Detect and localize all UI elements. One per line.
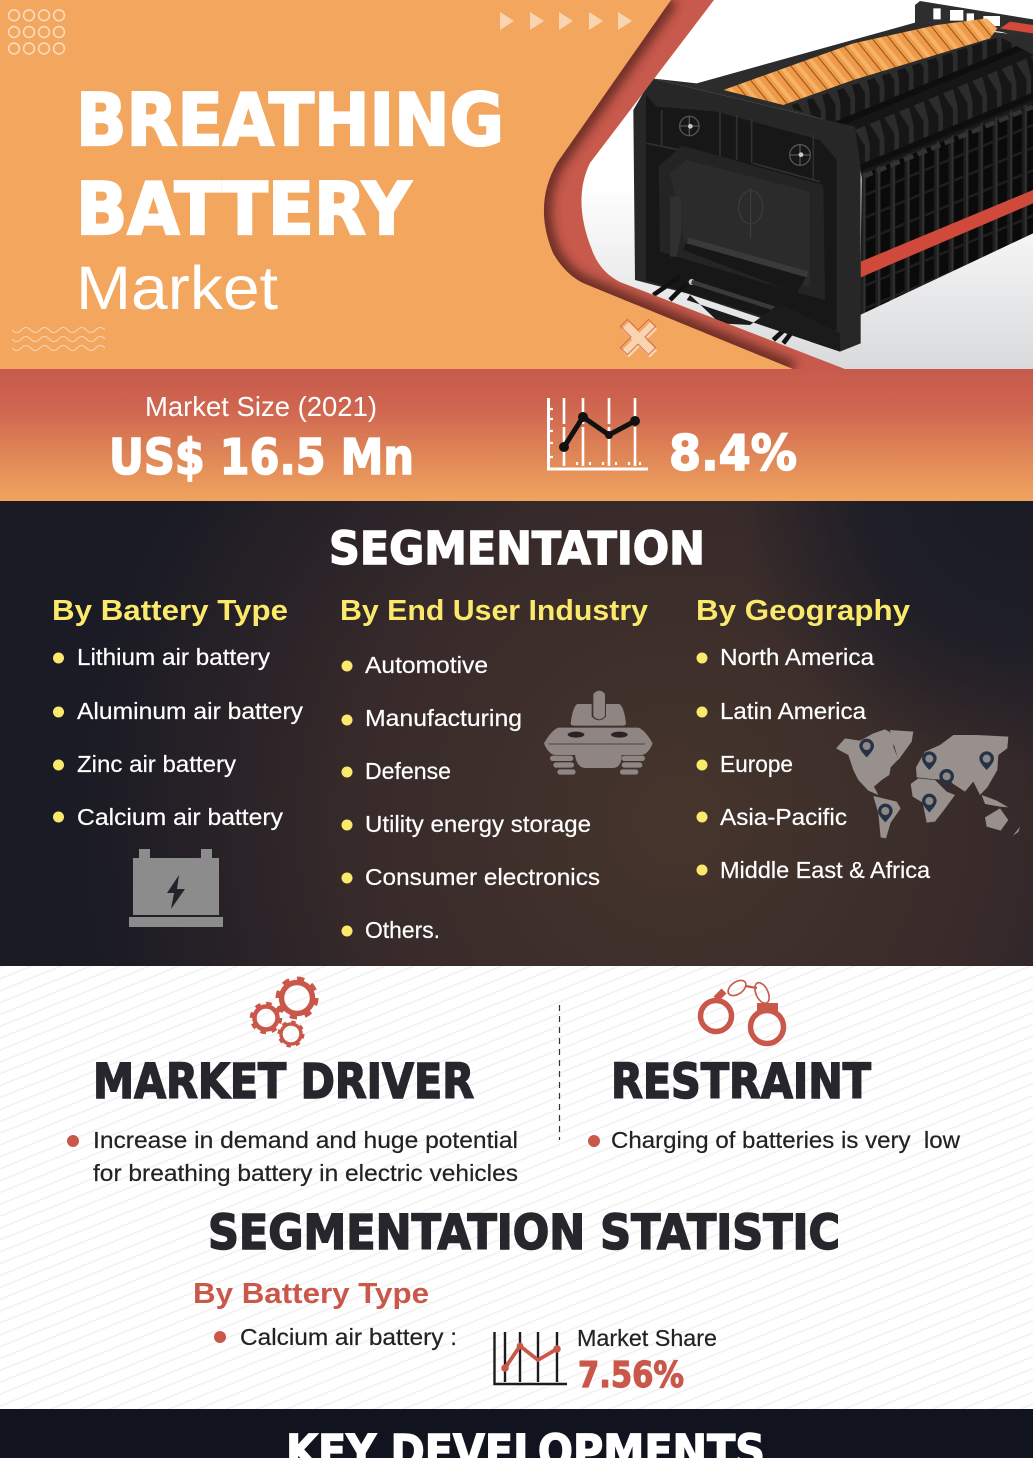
column: battery type: Aluminum air battery [77, 698, 304, 724]
title: BREATHING [76, 78, 504, 162]
column: end user industry: Others. [365, 917, 440, 943]
market stats band [0, 369, 1033, 501]
column: battery type: By Battery Type [52, 595, 288, 627]
front ribs [647, 110, 820, 182]
icon: handcuffs [700, 977, 784, 1044]
front plate [659, 146, 825, 300]
subheading: By Battery Type [193, 1278, 429, 1310]
re-cover lower left with orange [0, 283, 793, 369]
column: geography: Middle East & Africa [720, 857, 930, 883]
column: end user industry: Defense [365, 758, 451, 784]
heading: market driver: MARKET DRIVER [93, 1054, 474, 1110]
market size: Market Size (2021) [145, 391, 377, 422]
statistic item: Calcium air battery : [240, 1324, 457, 1350]
market share [577, 1325, 717, 1396]
plate handle [683, 237, 808, 293]
side rail [863, 107, 1033, 177]
plate logo [739, 188, 763, 238]
side cells [860, 102, 1033, 315]
column: geography: Asia-Pacific [720, 804, 847, 830]
icon: gears [252, 978, 316, 1046]
orange wrap [723, 18, 997, 105]
heading: restraint: RESTRAINT [611, 1054, 871, 1110]
decorative triangles [500, 12, 632, 30]
red tab [1000, 22, 1033, 33]
column: battery type [52, 595, 304, 830]
market size: US$ 16.5 Mn [109, 429, 414, 486]
lower foot [687, 295, 840, 352]
top surface [652, 23, 1033, 127]
column: battery type: Lithium air battery [77, 644, 271, 670]
title: BATTERY [76, 167, 412, 251]
column: geography: Europe [720, 751, 793, 777]
lower cables [653, 277, 803, 343]
market size [109, 391, 414, 486]
column: geography [696, 595, 930, 883]
title [76, 78, 504, 322]
market share: 7.56% [578, 1355, 684, 1396]
icon: growth chart [548, 398, 648, 469]
lower bar [692, 282, 783, 311]
column: geography: Latin America [720, 698, 866, 724]
ridged top edge [787, 37, 1033, 178]
market driver text: Increase in demand and huge potential [93, 1127, 518, 1153]
column: battery type: Calcium air battery [77, 804, 284, 830]
market share: Market Share [577, 1325, 717, 1351]
restraint text: Charging of batteries is very low [611, 1127, 960, 1153]
column: end user industry: Consumer electronics [365, 864, 600, 890]
rear tray [915, 1, 1033, 40]
plate latch [670, 197, 681, 257]
red curved stripe [544, 0, 845, 369]
column: battery type: Zinc air battery [77, 751, 237, 777]
market driver text: for breathing battery in electric vehicles [93, 1160, 518, 1186]
decorative cross [609, 309, 668, 368]
growth rate: 8.4% [669, 425, 797, 482]
front face [633, 78, 861, 352]
icon: share chart [494, 1332, 567, 1384]
front inner recess [646, 95, 837, 333]
column: end user industry: Utility energy storage [365, 811, 591, 837]
heading: SEGMENTATION [329, 522, 705, 575]
battery module illustration [633, 1, 1033, 352]
red stripe on side [861, 190, 1033, 277]
front screws [680, 116, 810, 165]
panel: key developments [0, 1409, 1033, 1458]
icon: battery [129, 849, 223, 927]
decorative waves [12, 328, 105, 350]
header panel [0, 0, 1033, 369]
market driver text [67, 1127, 518, 1186]
battery photo backdrop [581, 0, 1033, 369]
column: end user industry: Automotive [365, 652, 488, 678]
column: geography: North America [720, 644, 874, 670]
panel: segmentation [0, 501, 1033, 966]
panel: drivers and statistics [0, 966, 1033, 1409]
column: geography: By Geography [696, 595, 910, 627]
decorative ring grid [9, 10, 64, 54]
column: end user industry [340, 595, 648, 943]
heading: segmentation statistic: SEGMENTATION STATISTIC [208, 1205, 840, 1261]
column: end user industry: By End User Industry [340, 595, 648, 627]
icon: machine [544, 691, 653, 775]
title: Market [76, 254, 278, 322]
icon: world map [836, 729, 1020, 838]
column: end user industry: Manufacturing [365, 705, 522, 731]
